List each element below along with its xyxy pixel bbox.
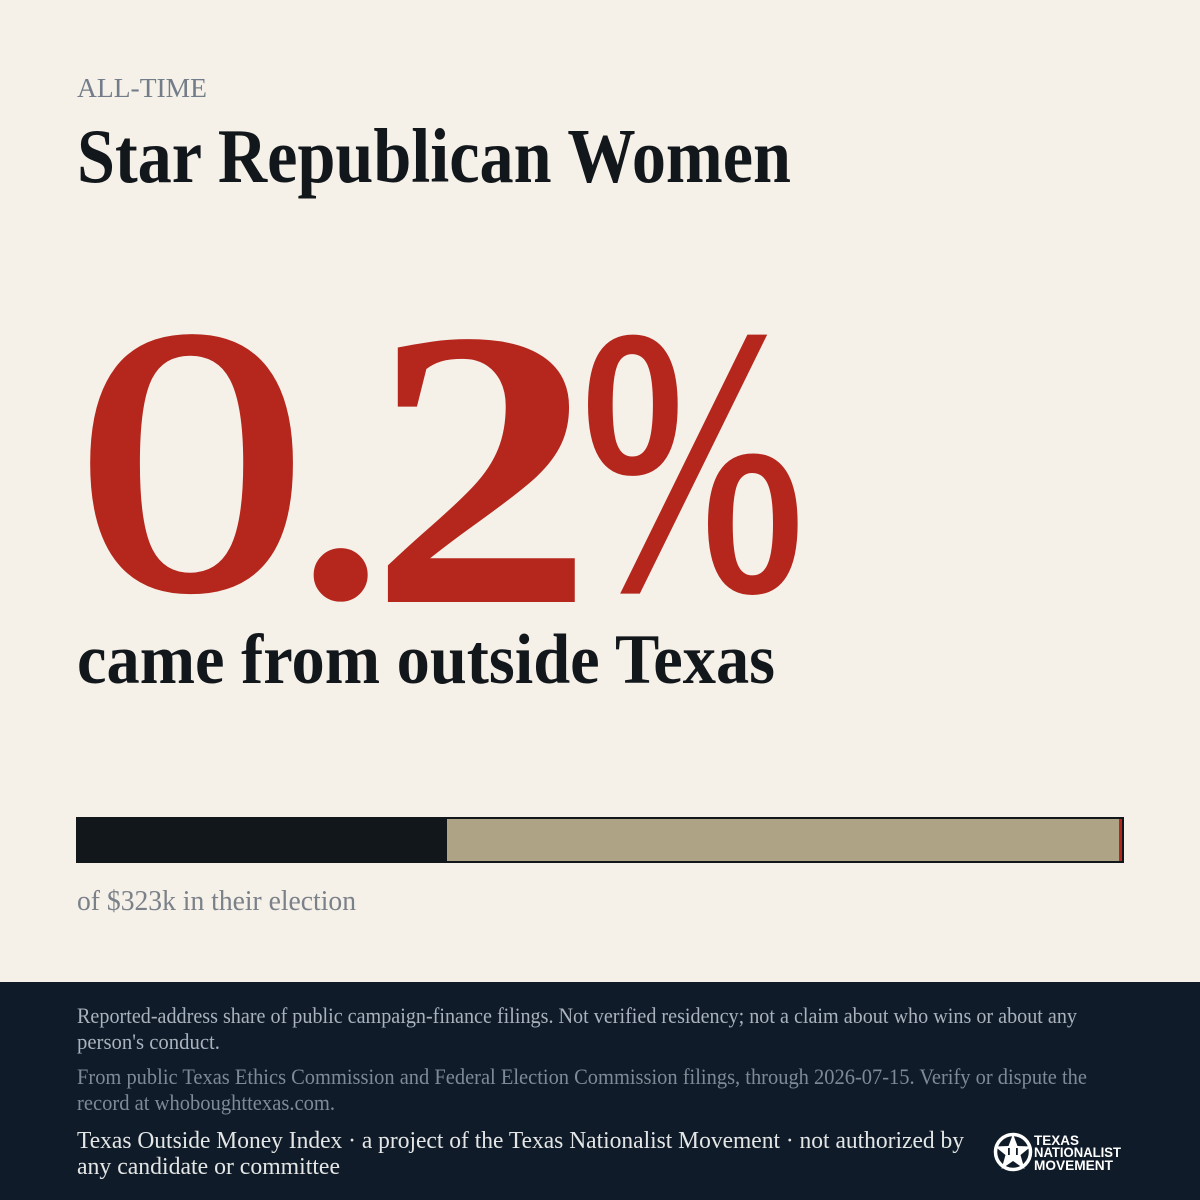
title: Star Republican Women [77, 113, 791, 199]
source text [77, 1064, 1087, 1115]
big number: 0.2% [77, 248, 805, 688]
big number: 0.2%: 0 [77, 253, 306, 669]
subhead: came from outside Texas [77, 621, 775, 699]
big number: 0.2%: % [581, 252, 805, 669]
disclaimer text [77, 1003, 1077, 1054]
logo: Texas Nationalist Movement [995, 1133, 1122, 1173]
icon: star in ring [995, 1134, 1031, 1170]
disclaimer text: person's conduct. [77, 1029, 220, 1054]
logo wordmark [1034, 1133, 1122, 1173]
logo wordmark: MOVEMENT [1034, 1158, 1114, 1173]
bar caption: of $323k in their election [77, 886, 356, 917]
footer panel [0, 982, 1200, 1200]
project credit: any candidate or committee [77, 1154, 340, 1180]
source text: record at whoboughttexas.com. [77, 1090, 335, 1115]
disclaimer text: Reported-address share of public campaign-finance filings. Not verified residency; not a claim about who wins or about any [77, 1003, 1077, 1028]
big number: 0.2%: 2 [369, 248, 594, 688]
source text: From public Texas Ethics Commission and Federal Election Commission filings, through 2026-07-15. Verify or dispute the [77, 1064, 1087, 1089]
eyebrow: all-time: ALL-TIME [77, 73, 207, 103]
bar segment: Texas share [447, 819, 1119, 861]
logo wordmark: TEXAS [1034, 1133, 1079, 1148]
project credit [77, 1128, 964, 1180]
big number: 0.2%: . [299, 302, 382, 669]
stacked bar [76, 817, 1124, 863]
project credit: Texas Outside Money Index · a project of the Texas Nationalist Movement · not authorized by [77, 1128, 964, 1154]
logo wordmark: NATIONALIST [1034, 1145, 1122, 1160]
bar segment: outside Texas [1119, 819, 1122, 861]
